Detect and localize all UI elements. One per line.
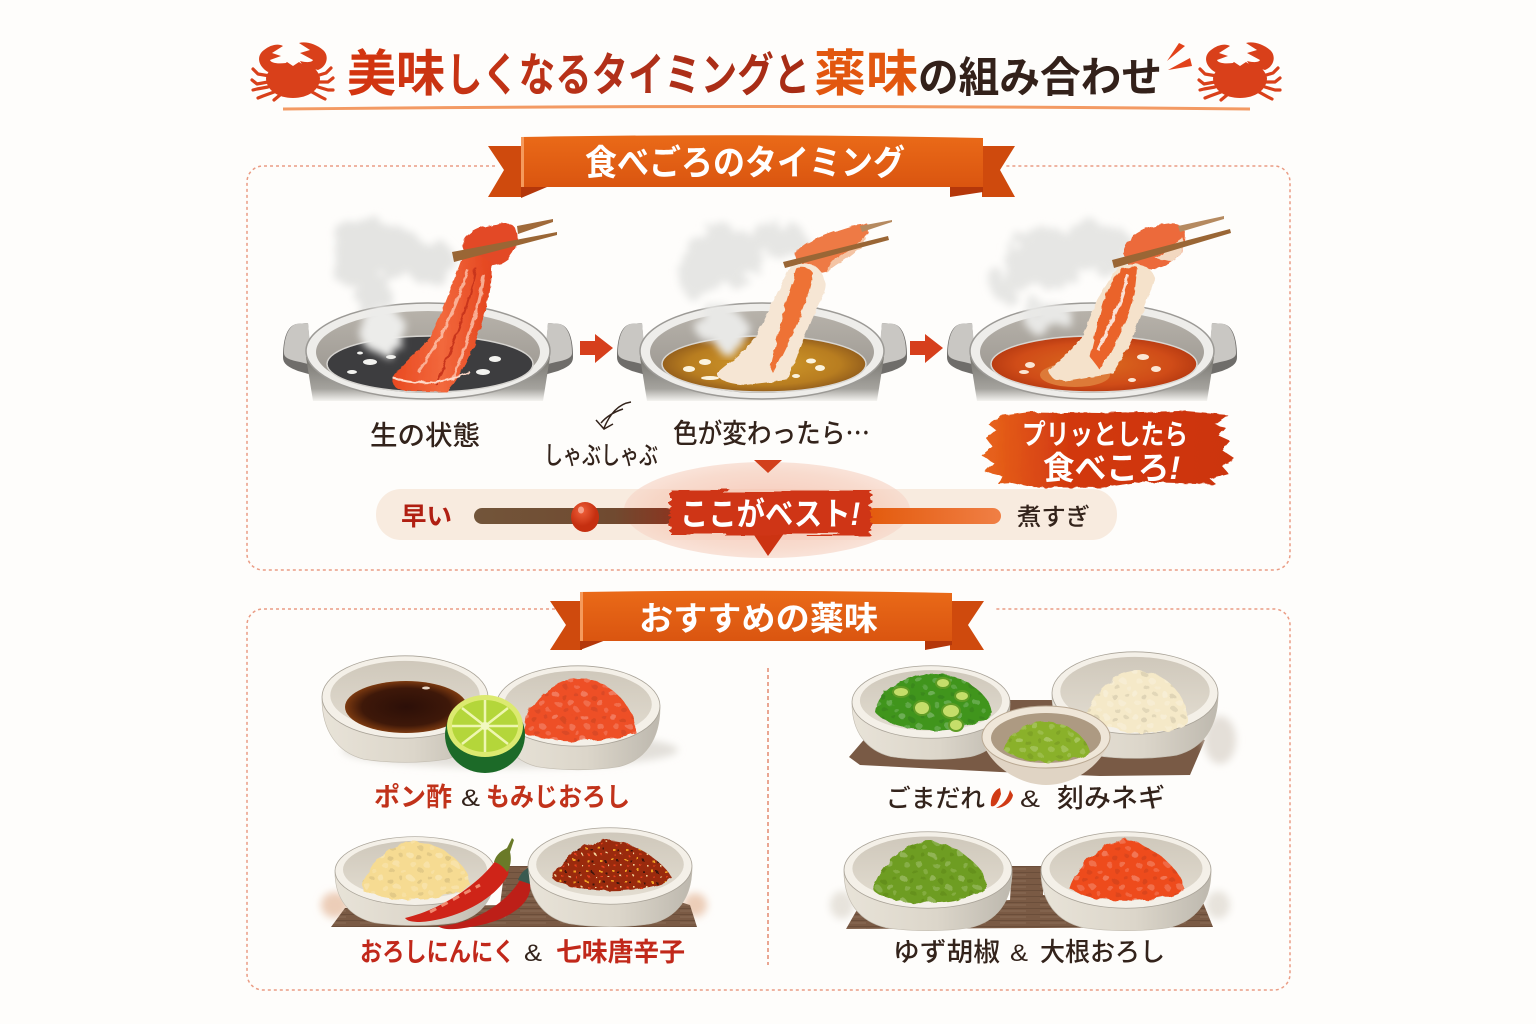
bowl: yuzu kosho: [844, 832, 1012, 931]
callout: plump then eat: プリッとしたら: [1022, 419, 1188, 450]
bowl: momiji oroshi: [496, 666, 660, 770]
label: yuzu kosho and daikon oroshi: ゆず胡椒: [893, 937, 1000, 967]
label: shabu shabu: しゃぶしゃぶ: [544, 442, 658, 470]
title: の組み合わせ: [918, 54, 1162, 101]
bowl: grated radish: [1052, 652, 1218, 758]
label: ponzu and momiji oroshi: ポン酢: [374, 782, 452, 812]
callout: best here: [670, 491, 871, 556]
label: garlic and shichimi: [360, 937, 685, 967]
callout: plump then eat: 食べころ!: [1043, 450, 1180, 486]
gauge bar: late side: [866, 508, 1001, 524]
dish set: yuzu kosho and daikon oroshi: [830, 832, 1230, 931]
label: sesame sauce and green onion: ごまだれ: [886, 785, 985, 813]
icon: sudachi citrus: [445, 695, 525, 773]
callout: plump then eat: [981, 411, 1234, 488]
ribbon heading: condiments: おすすめの薬味: [639, 600, 878, 637]
dish set: sesame sauce and green onion: [849, 652, 1236, 785]
panel: timing: [247, 135, 1290, 570]
dish set: ponzu and momiji oroshi: [322, 656, 678, 773]
callout: best here: ここがベスト!: [680, 496, 860, 532]
arrow 2: [910, 334, 943, 363]
bowl: small chopped greens: [982, 706, 1110, 785]
ribbon heading: timing: 食べごろのタイミング: [585, 144, 905, 183]
wooden board: [849, 700, 1205, 776]
arrow 1: [580, 334, 613, 363]
label: yuzu kosho and daikon oroshi: [893, 937, 1165, 967]
label: yuzu kosho and daikon oroshi: 大根おろし: [1040, 937, 1165, 967]
bowl: grated garlic: [335, 837, 495, 925]
title: しくなるタイミングと: [446, 49, 810, 101]
timing gauge: [376, 460, 1117, 558]
step 3: plump crab in pot: [947, 216, 1237, 401]
gauge bar: early side: [474, 508, 674, 524]
label: too early: 早い: [401, 503, 452, 531]
label: overcooked: 煮すぎ: [1017, 504, 1090, 531]
bowl: ponzu: [322, 656, 488, 762]
label: garlic and shichimi: おろしにんにく: [360, 937, 515, 967]
label: ponzu and momiji oroshi: &: [461, 785, 480, 812]
label: ponzu and momiji oroshi: もみじおろし: [486, 782, 630, 812]
label: sesame sauce and green onion: 刻みネギ: [1057, 783, 1165, 813]
title: 薬味: [814, 46, 918, 102]
label: garlic and shichimi: 七味唐辛子: [556, 937, 685, 967]
bowl: daikon oroshi: [1041, 832, 1211, 931]
icon: crab right: [1199, 42, 1280, 100]
label: garlic and shichimi: &: [524, 940, 542, 967]
label: ponzu and momiji oroshi: [374, 782, 630, 812]
panel: condiments: [247, 591, 1290, 990]
gauge marker: [571, 502, 599, 532]
title: 美味: [347, 46, 445, 102]
title: [252, 42, 1280, 109]
curly motion arrow: [596, 402, 631, 429]
icon: crab left: [252, 42, 333, 100]
bowl: shichimi: [528, 828, 692, 927]
bowl: green onion: [852, 666, 1010, 760]
label: yuzu kosho and daikon oroshi: &: [1010, 940, 1028, 967]
label: sesame sauce and green onion: &: [1020, 786, 1040, 813]
label: when colour changes: 色が変わったら…: [673, 412, 870, 451]
wooden board: [846, 866, 1213, 929]
ribbon heading: timing: [488, 135, 1015, 198]
icon: chili accent: [991, 788, 1013, 808]
icon: red chili peppers: [405, 838, 530, 929]
wooden board: [331, 866, 697, 927]
label: sesame sauce and green onion: [886, 783, 1165, 813]
dish set: garlic and shichimi: [321, 828, 707, 929]
step 1: raw crab in pot: [283, 219, 573, 401]
step 2: colour-changing crab in pot: [617, 220, 907, 401]
title underline: [283, 106, 1250, 109]
ribbon heading: condiments: [550, 591, 984, 650]
icon: accent sparks: [1167, 43, 1192, 70]
label: raw state: 生の状態: [370, 421, 480, 451]
